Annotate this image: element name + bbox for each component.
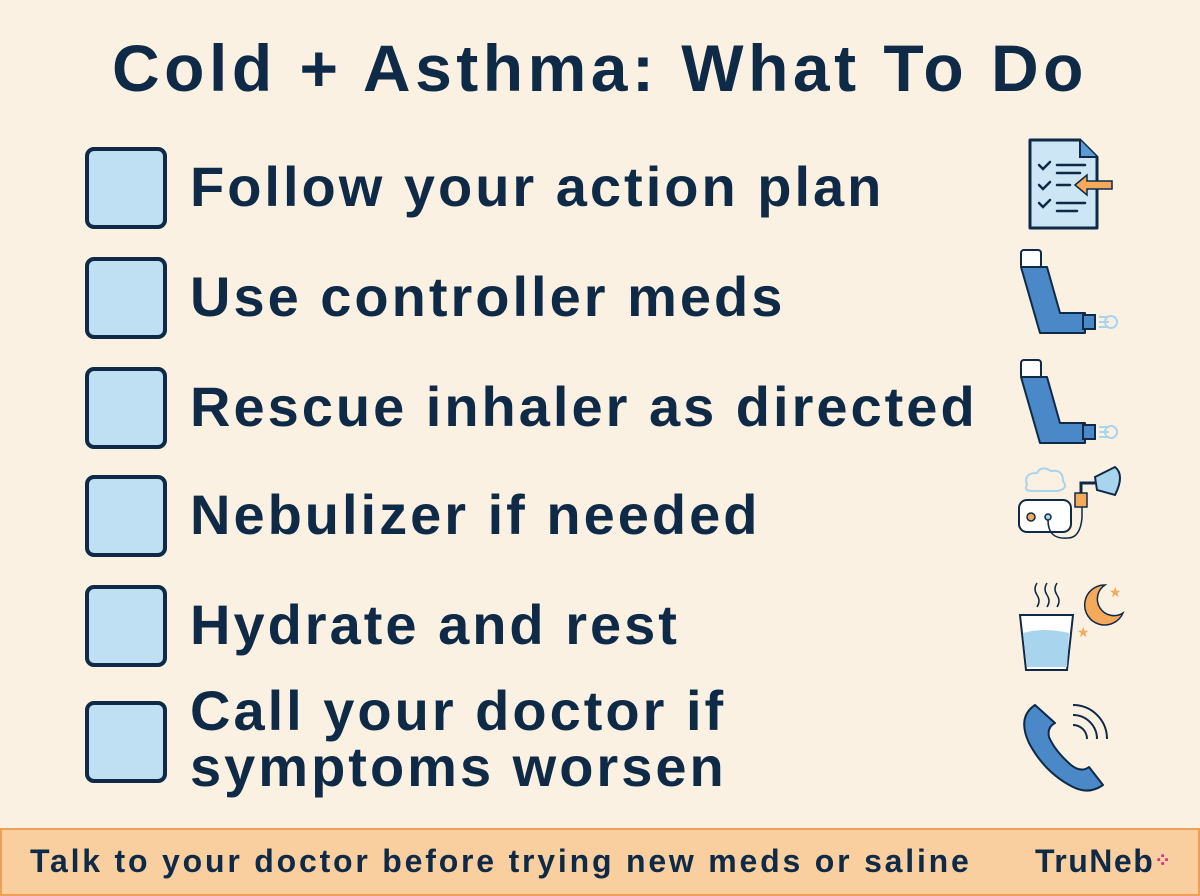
text 1: Follow your action plan [190, 155, 884, 218]
text 4: Nebulizer if needed [190, 483, 760, 546]
text 6: Call your doctor if [190, 679, 726, 742]
icon: phone [1023, 704, 1108, 792]
item 6 [85, 679, 727, 798]
checkbox 6 [85, 701, 167, 783]
icon: action plan document [1028, 138, 1113, 230]
item 5 [85, 585, 680, 667]
text 5: Hydrate and rest [190, 593, 680, 656]
text 2: Use controller meds [190, 265, 785, 328]
title: Cold + Asthma: What To Do [112, 31, 1088, 105]
item 1 [85, 147, 884, 229]
item 4 [85, 475, 760, 557]
icon: controller inhaler [1020, 249, 1118, 334]
checkbox 3 [85, 367, 167, 449]
icon: water and rest: ★ [1077, 624, 1090, 640]
checkbox 2 [85, 257, 167, 339]
item 3 [85, 367, 978, 449]
checkbox 4 [85, 475, 167, 557]
text 3: Rescue inhaler as directed [190, 375, 978, 438]
icon: water and rest: ★ [1109, 584, 1122, 600]
text 6 [190, 679, 727, 798]
icon: water and rest [1018, 582, 1125, 671]
footer text: Talk to your doctor before trying new meds or saline [30, 843, 972, 879]
item 2 [85, 257, 785, 339]
text 6: symptoms worsen [190, 735, 727, 798]
icon: rescue inhaler [1020, 359, 1118, 444]
checkbox 1 [85, 147, 167, 229]
logo: TruNeb: TruNeb⁘ [1035, 843, 1172, 879]
footer banner [0, 828, 1200, 896]
checkbox 5 [85, 585, 167, 667]
icon: nebulizer [1018, 466, 1121, 539]
